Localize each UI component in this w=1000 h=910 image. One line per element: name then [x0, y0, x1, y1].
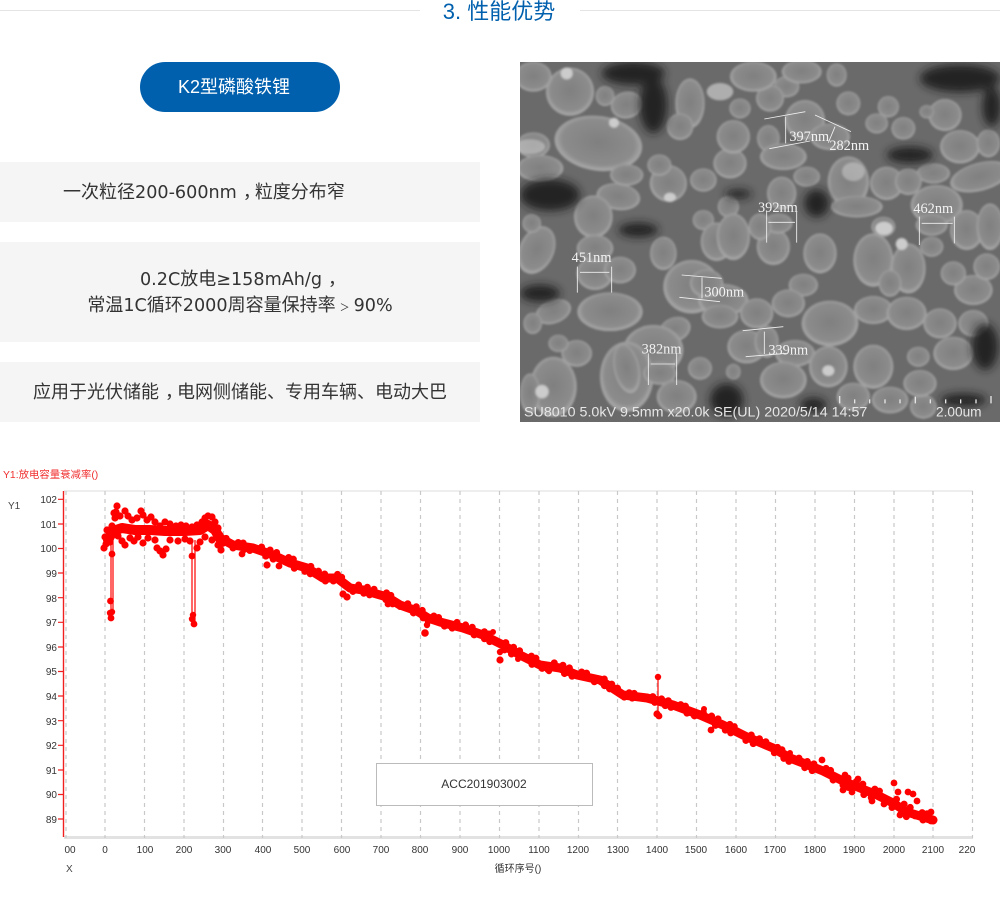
y axis: 90	[46, 790, 57, 801]
measurement labels: 397nm	[789, 129, 829, 145]
measurement labels: 451nm	[572, 250, 611, 266]
x axis labels: 1800	[804, 845, 827, 856]
legend box	[376, 764, 592, 806]
y axis: 94	[46, 692, 57, 703]
x axis labels: 2000	[883, 845, 906, 856]
x axis labels: 1200	[567, 845, 590, 856]
legend box: ACC201903002	[441, 777, 527, 791]
button: K2 product name: K2型磷酸铁锂	[178, 77, 290, 97]
y axis: 92	[46, 741, 57, 752]
y axis: 97	[46, 618, 57, 629]
x axis labels: 1100	[528, 845, 550, 856]
scale and instrument data bar: 2.00um	[936, 404, 982, 419]
y axis: 89	[46, 815, 57, 826]
measurement labels: 282nm	[829, 138, 869, 154]
chart: capacity retention over cycles: X	[66, 864, 73, 875]
x axis labels	[64, 845, 976, 856]
y axis: 98	[46, 594, 57, 605]
x axis labels: 1900	[843, 845, 866, 856]
y axis: 96	[46, 643, 57, 654]
x axis title: 循环序号()	[495, 862, 541, 875]
x axis labels: 1500	[685, 845, 708, 856]
x axis labels: 1700	[764, 845, 787, 856]
scale and instrument data bar	[524, 396, 992, 419]
x axis labels: 500	[294, 845, 311, 856]
y axis: 101	[40, 520, 57, 531]
y axis: 91	[46, 766, 57, 777]
x axis labels: 1000	[488, 845, 511, 856]
measurement labels: 382nm	[642, 342, 681, 358]
panel: capacity and cycle life: 常温1C循环2000周容量保持率 90%	[87, 295, 393, 316]
y axis: 99	[46, 569, 57, 580]
panel: applications	[0, 362, 480, 422]
measurement labels: 300nm	[704, 285, 744, 301]
x axis labels: 220	[959, 845, 976, 856]
chart: capacity retention over cycles: Y1	[8, 501, 21, 512]
x axis labels: 2100	[922, 845, 945, 856]
x axis labels: 800	[412, 845, 429, 856]
x axis labels: 100	[137, 845, 154, 856]
panel: capacity and cycle life: 0.2C放电≥158mAh/g	[140, 269, 322, 290]
scale and instrument data bar: SU8010 5.0kV 9.5mm x20.0k SE(UL) 2020/5/14 14:57	[524, 404, 867, 419]
x axis labels: 900	[452, 845, 469, 856]
x axis labels: 700	[373, 845, 390, 856]
measurement labels: 392nm	[758, 200, 798, 216]
x axis labels: 600	[334, 845, 351, 856]
panel: capacity and cycle life	[0, 242, 480, 342]
x axis labels: 1400	[646, 845, 669, 856]
measurement labels	[572, 129, 953, 359]
panel: particle size: ，	[243, 182, 261, 203]
panel: particle size: 一次粒径200-600nm 粒度分布窄	[63, 182, 345, 203]
x axis labels: 200	[176, 845, 193, 856]
data series	[100, 502, 934, 821]
measurement labels: 462nm	[913, 201, 953, 217]
x axis labels: 1300	[607, 845, 630, 856]
measurement labels: 339nm	[768, 343, 808, 359]
button: K2 product name	[140, 62, 340, 112]
y axis: 93	[46, 717, 57, 728]
x axis labels: 300	[215, 845, 232, 856]
measurement lines	[577, 112, 954, 385]
y axis: 95	[46, 667, 57, 678]
SEM micrograph	[520, 62, 1000, 422]
panel: applications: ，	[165, 382, 183, 403]
panel: capacity and cycle life: ，	[328, 269, 346, 290]
y axis: 100	[40, 544, 57, 555]
y axis	[40, 491, 64, 837]
dark voids	[520, 62, 1000, 417]
x axis labels: 400	[255, 845, 272, 856]
y axis: 102	[40, 495, 57, 506]
panel: applications: 应用于光伏储能 电网侧储能、专用车辆、电动大巴	[33, 382, 447, 403]
panel: particle size	[0, 162, 480, 222]
panel: capacity and cycle life: ＞	[340, 303, 350, 314]
grains	[510, 60, 1000, 419]
bright specks	[515, 67, 908, 398]
chart: capacity retention over cycles	[3, 468, 976, 875]
y axis title: Y1:放电容量衰减率()	[3, 468, 98, 481]
x axis labels: 0	[102, 845, 108, 856]
x axis labels: 1600	[725, 845, 748, 856]
x axis labels: 00	[64, 845, 76, 856]
